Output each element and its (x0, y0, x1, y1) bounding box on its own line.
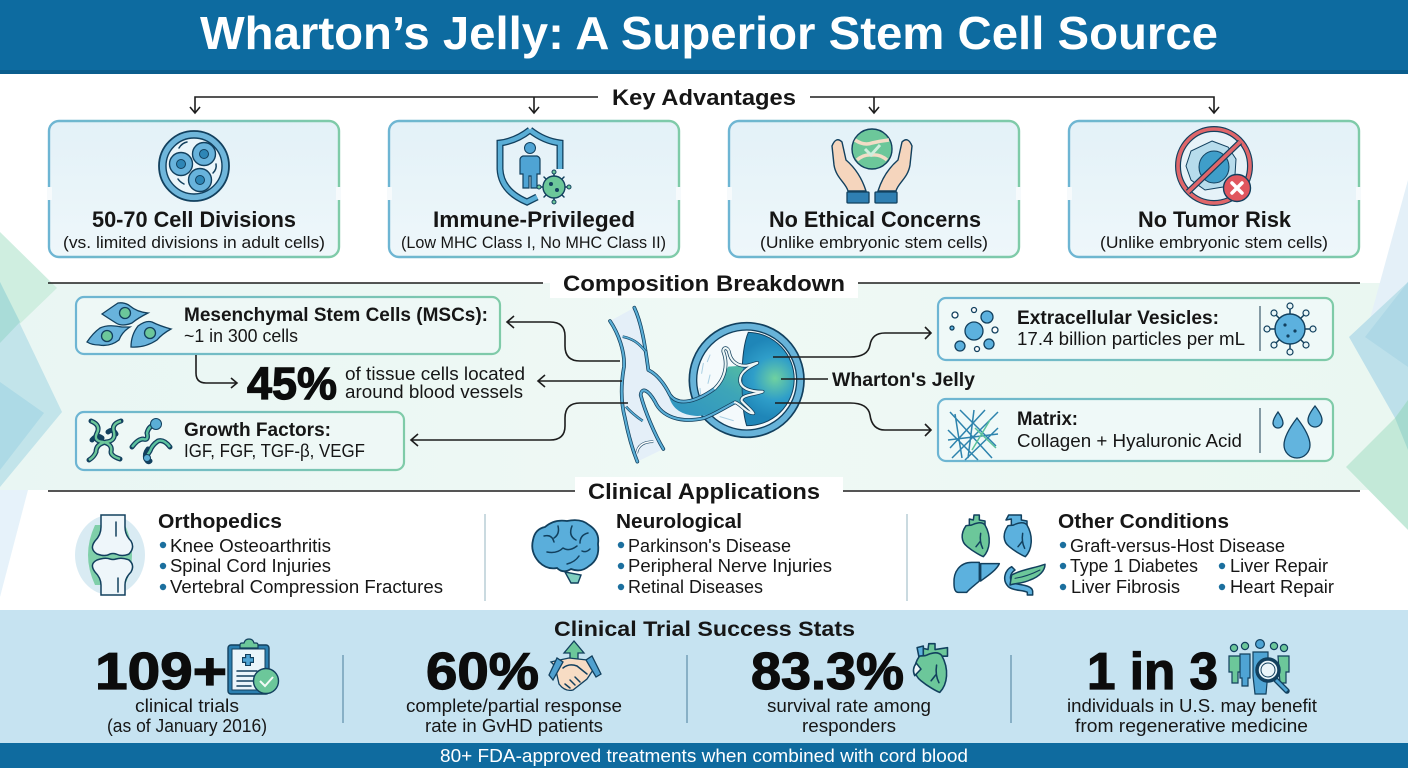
text: extracellular vesicles: Extracellular Vesicles: (1017, 308, 1219, 329)
stat: 45% around vessels: 45% (247, 358, 337, 409)
divider and icon: virus particle (1260, 303, 1316, 355)
stat: 109+ clinical trials (95, 639, 278, 736)
stat: 1 in 3: 1 in 3 (1087, 643, 1218, 701)
divider (686, 655, 688, 723)
text: MSCs: ~1 in 300 cells (184, 326, 298, 346)
icon: protein strands (89, 418, 170, 462)
diagram: umbilical cord cross-section (610, 308, 804, 462)
panel: extracellular vesicles (938, 298, 1333, 360)
panel: matrix (938, 399, 1333, 461)
panel: no tumor risk (1067, 121, 1361, 257)
stat: 45% around vessels: of tissue cells located (345, 364, 525, 384)
clinical: orthopedics (75, 511, 443, 597)
right decorative facets (1346, 180, 1408, 530)
panel: growth factors (76, 412, 404, 470)
divider (1010, 655, 1012, 723)
icon: dividing cells (159, 131, 229, 201)
divider and icon: water drops (1260, 406, 1322, 458)
arrow: jelly to vesicles (773, 327, 931, 357)
text: neurological list: Retinal Diseases (628, 577, 763, 597)
section heading: key advantages: Key Advantages (612, 85, 796, 110)
text: 50-70 cell divisions: 50-70 Cell Divisions (92, 207, 296, 232)
text: other conditions list: Liver Fibrosis (1071, 577, 1180, 597)
stat: 1 in 3 (1067, 640, 1317, 736)
icon: organs (954, 515, 1045, 595)
stat: 60% response: complete/partial response (406, 696, 622, 716)
panel: immune-privileged (387, 121, 681, 257)
text: orthopedics list: Vertebral Compression Fractures (170, 577, 443, 597)
text: other conditions list: Other Conditions (1058, 511, 1229, 533)
label: Wharton's Jelly: Wharton's Jelly (832, 370, 975, 391)
text: no ethical concerns: (Unlike embryonic stem cells) (760, 233, 988, 252)
footer bar: 80+ FDA-approved treatments when combined with cord blood (440, 746, 968, 766)
stat: 83.3% survival (751, 643, 948, 736)
text: neurological list: Parkinson's Disease (628, 536, 791, 556)
arrow: vessel to 45% (538, 375, 622, 387)
section heading: composition breakdown (48, 270, 1360, 298)
title: Wharton’s Jelly: A Superior Stem Cell Source (200, 7, 1218, 59)
text: neurological list: Neurological (616, 511, 742, 533)
icon: vesicles (950, 308, 998, 352)
stat: 1 in 3: individuals in U.S. may benefit (1067, 696, 1317, 716)
section heading: key advantages (190, 85, 1219, 113)
arrow: vessel to MSCs (507, 316, 620, 361)
text: other conditions list: Type 1 Diabetes (1070, 556, 1198, 576)
text: 50-70 cell divisions (63, 207, 325, 252)
stat: 109+ clinical trials: 109+ (95, 643, 227, 701)
text: matrix (1017, 409, 1242, 451)
text: growth factors: IGF, FGF, TGF-β, VEGF (184, 441, 365, 461)
stat: 60% response (406, 641, 622, 736)
icon: collagen fibres (948, 410, 998, 460)
text: orthopedics list: Spinal Cord Injuries (170, 556, 331, 576)
divider (484, 514, 486, 601)
text: growth factors (184, 420, 365, 461)
arrow: MSCs to 45% (196, 355, 237, 388)
panel: clinical trial success stats (0, 610, 1408, 743)
stat: 109+ clinical trials: (as of January 2016) (107, 716, 267, 736)
stat: 83.3% survival: 83.3% (751, 643, 904, 701)
text: neurological list: Peripheral Nerve Injuries (628, 556, 832, 576)
text: orthopedics list: Knee Osteoarthritis (170, 536, 331, 556)
text: immune-privileged (401, 207, 666, 252)
text: extracellular vesicles: 17.4 billion particles per mL (1017, 329, 1245, 349)
stat: 1 in 3: from regenerative medicine (1075, 716, 1308, 736)
icon: clipboard (228, 639, 278, 694)
text: extracellular vesicles (1017, 308, 1245, 349)
composition background band (0, 283, 1408, 490)
text: no tumor risk (1100, 207, 1328, 252)
icon: crossed tumor cell (1178, 129, 1250, 203)
text: 50-70 cell divisions: (vs. limited divisions in adult cells) (63, 233, 325, 252)
divider (342, 655, 344, 723)
icon: MSC cells (87, 303, 171, 347)
stat: 83.3% survival: responders (802, 716, 896, 736)
footer bar (0, 743, 1408, 768)
stat: 45% around vessels: around blood vessels (345, 382, 523, 402)
arrow: vessel to growth factors (411, 403, 628, 446)
stat: 83.3% survival: survival rate among (767, 696, 931, 716)
text: immune-privileged: Immune-Privileged (433, 207, 635, 232)
stat: 60% response: 60% (426, 643, 539, 701)
text: no tumor risk: No Tumor Risk (1138, 207, 1292, 232)
section heading: clinical applications: Clinical Applications (588, 479, 820, 504)
text: other conditions list: Graft-versus-Host Disease (1070, 536, 1285, 556)
icon: knee joint (75, 515, 145, 595)
panel: mesenchymal stem cells (76, 297, 500, 354)
stat: 45% around vessels (247, 358, 525, 409)
text: other conditions list: Heart Repair (1230, 577, 1334, 597)
icon: anatomical heart (913, 644, 948, 692)
text: other conditions list: Liver Repair (1230, 556, 1328, 576)
text: orthopedics list: Orthopedics (158, 511, 282, 533)
stat: 109+ clinical trials: clinical trials (135, 696, 239, 716)
panel: no ethical concerns (727, 121, 1021, 257)
divider (906, 514, 908, 601)
header banner (0, 0, 1408, 74)
icon: handshake with arrow (549, 641, 601, 690)
icon: brain (532, 520, 598, 583)
text: matrix: Matrix: (1017, 409, 1078, 430)
arrow: jelly to matrix (775, 403, 931, 436)
text: neurological list (616, 511, 832, 597)
text: orthopedics list (158, 511, 443, 597)
clinical: neurological (532, 511, 832, 597)
text: MSCs: Mesenchymal Stem Cells (MSCs): (184, 305, 488, 326)
clinical: other conditions (954, 511, 1334, 597)
icon: hands holding green check (832, 129, 912, 203)
text: immune-privileged: (Low MHC Class I, No MHC Class II) (401, 233, 666, 252)
section heading: composition breakdown: Composition Breakdown (563, 271, 845, 296)
text: MSCs (184, 305, 488, 346)
text: matrix: Collagen + Hyaluronic Acid (1017, 431, 1242, 451)
heading: stats: Clinical Trial Success Stats (554, 618, 855, 641)
left decorative facets (0, 232, 62, 597)
icon: shield with person and virus (500, 130, 571, 204)
icon: people with magnifier (1229, 640, 1289, 694)
text: no tumor risk: (Unlike embryonic stem cells) (1100, 233, 1328, 252)
text: no ethical concerns (760, 207, 988, 252)
text: no ethical concerns: No Ethical Concerns (769, 207, 981, 232)
stat: 60% response: rate in GvHD patients (425, 716, 603, 736)
panel: cell divisions (47, 121, 341, 257)
section heading: clinical applications (48, 477, 1360, 504)
text: other conditions list (1058, 511, 1334, 597)
text: growth factors: Growth Factors: (184, 420, 331, 441)
